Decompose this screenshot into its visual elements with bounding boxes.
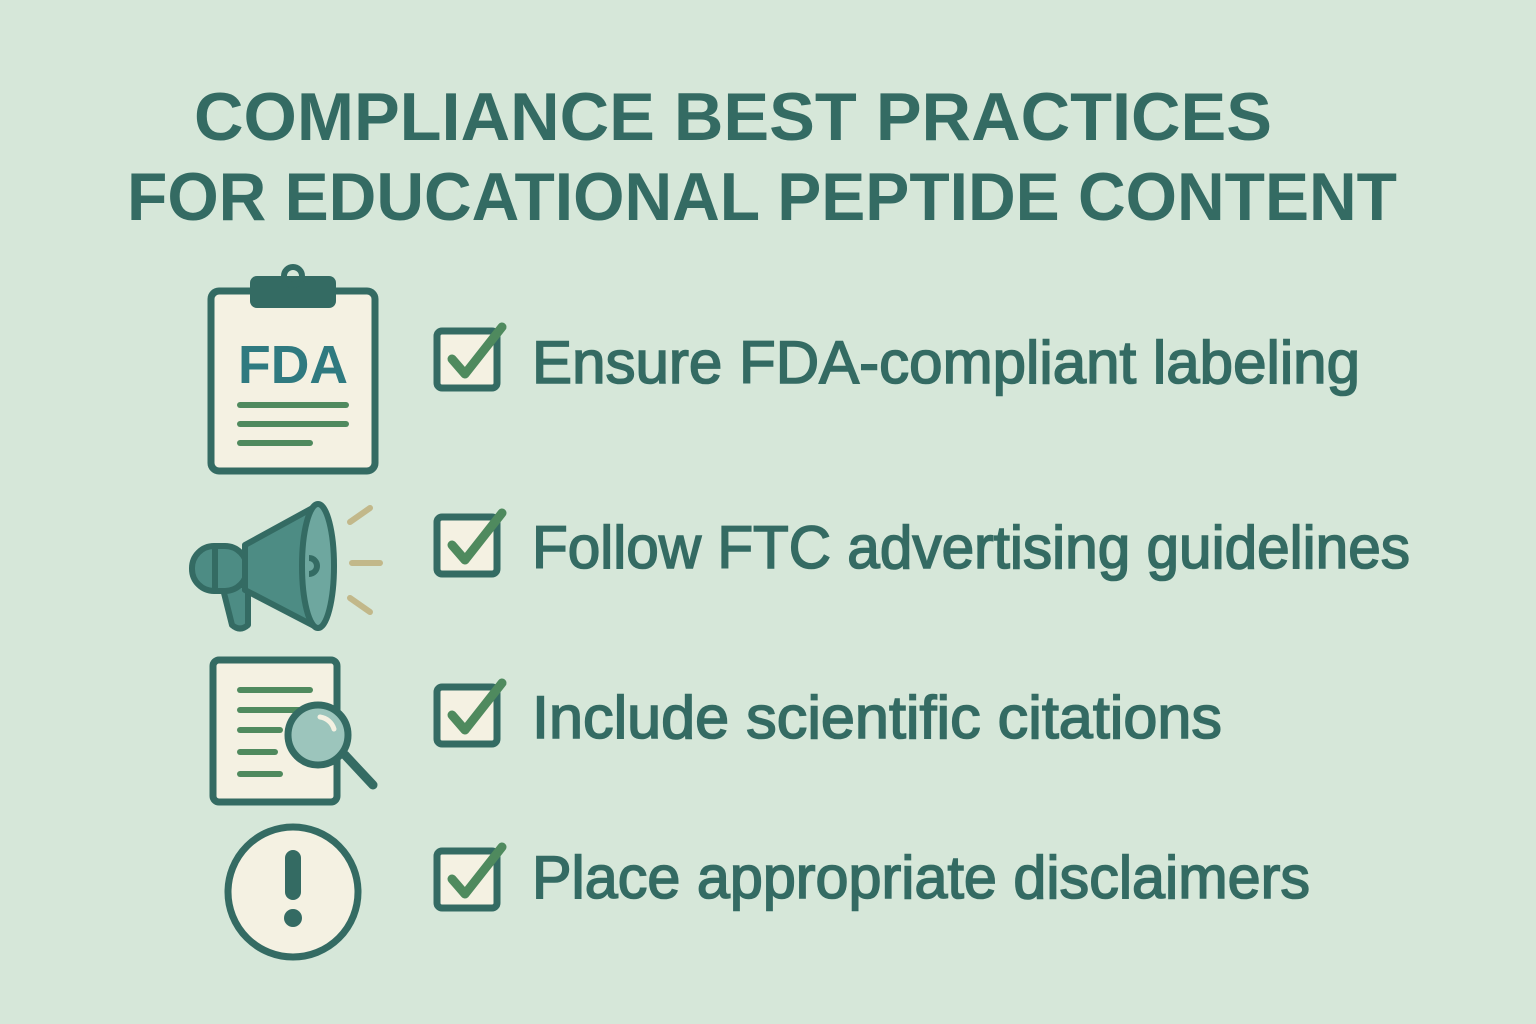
icon: document with magnifier (213, 660, 373, 802)
icon: megaphone (192, 504, 380, 628)
checkboxes (437, 327, 502, 908)
icon: FDA clipboard: FDA (238, 335, 348, 395)
item texts: Follow FTC advertising guidelines (532, 514, 1410, 581)
item texts: Place appropriate disclaimers (532, 844, 1310, 911)
item texts: Ensure FDA-compliant labeling (532, 329, 1360, 396)
item texts (532, 329, 1410, 911)
icon: exclamation circle (228, 827, 358, 957)
icon: FDA clipboard (211, 267, 375, 471)
item texts: Include scientific citations (532, 684, 1222, 751)
title (127, 79, 1397, 235)
title: FOR EDUCATIONAL PEPTIDE CONTENT (127, 159, 1397, 235)
title: COMPLIANCE BEST PRACTICES (194, 79, 1272, 155)
